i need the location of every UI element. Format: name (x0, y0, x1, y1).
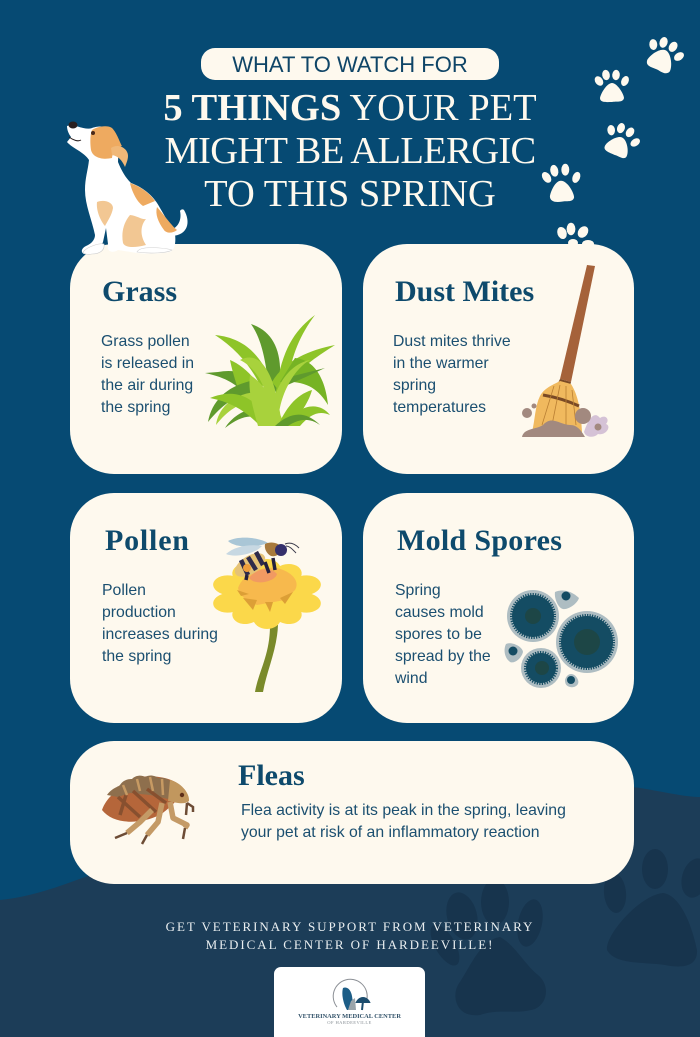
text: mold spores: spores to be (395, 626, 482, 643)
text: mold spores: causes mold (395, 604, 484, 621)
footer text: GET VETERINARY SUPPORT FROM VETERINARY (166, 919, 534, 934)
text: grass: the spring (101, 399, 170, 416)
text: dust mites: spring (393, 377, 436, 394)
text: pollen (102, 582, 218, 665)
title: 5 THINGS YOUR PET (163, 87, 537, 129)
heading: pollen: Pollen (105, 524, 190, 557)
icon: flea (102, 776, 194, 845)
footer text (166, 919, 534, 952)
text: dust mites: Dust mites thrive (393, 333, 511, 350)
panel: dust mites (363, 244, 634, 474)
icon: grass (205, 315, 335, 428)
text: fleas (241, 802, 566, 841)
heading: dust mites: Dust Mites (395, 275, 534, 308)
icon: dog (67, 122, 188, 255)
icon: small cream paw prints (540, 31, 690, 248)
text: mold spores (395, 582, 491, 687)
panel: mold spores (363, 493, 634, 723)
panel: fleas (70, 741, 634, 884)
heading: grass: Grass (102, 275, 177, 308)
text: grass: is released in (101, 355, 194, 372)
text: mold spores: wind (395, 670, 428, 687)
text: pollen: production (102, 604, 176, 621)
heading pill: WHAT TO WATCH FOR (232, 52, 468, 77)
stem (255, 625, 278, 692)
bee (228, 538, 268, 547)
text: fleas: Flea activity is at its peak in the spring, leaving (241, 802, 566, 819)
icon: bee on flower (213, 538, 321, 692)
icon: large background paw prints (425, 849, 700, 1015)
heading pill (201, 48, 499, 80)
logo text: VETERINARY MEDICAL CENTER (298, 1013, 401, 1020)
panel: pollen (70, 493, 342, 723)
heading: fleas: Fleas (238, 759, 305, 792)
text: mold spores: Spring (395, 582, 441, 599)
text: fleas: your pet at risk of an inflammatory reaction (241, 824, 540, 841)
footer text: MEDICAL CENTER OF HARDEEVILLE! (206, 937, 494, 952)
text: pollen: Pollen (102, 582, 146, 599)
panel: logo (274, 967, 425, 1037)
heading: mold spores: Mold Spores (397, 524, 562, 557)
title: MIGHT BE ALLERGIC (164, 130, 536, 172)
title (163, 87, 537, 215)
text: grass: Grass pollen (101, 333, 190, 350)
text: pollen: the spring (102, 648, 171, 665)
text: dust mites: temperatures (393, 399, 486, 416)
logo subtext: OF HARDEEVILLE (327, 1020, 372, 1025)
panel: grass (70, 244, 342, 474)
icon: mold colonies (504, 590, 618, 688)
title: TO THIS SPRING (204, 173, 496, 215)
text: grass: the air during (101, 377, 193, 394)
text: pollen: increases during (102, 626, 218, 643)
text: dust mites: in the warmer (393, 355, 489, 372)
text: mold spores: spread by the (395, 648, 491, 665)
icon: logo emblem (332, 978, 371, 1010)
background wave (0, 787, 700, 1037)
text: grass (101, 333, 194, 416)
icon: broom (522, 265, 608, 437)
petals (209, 559, 325, 629)
text: dust mites (393, 333, 511, 416)
